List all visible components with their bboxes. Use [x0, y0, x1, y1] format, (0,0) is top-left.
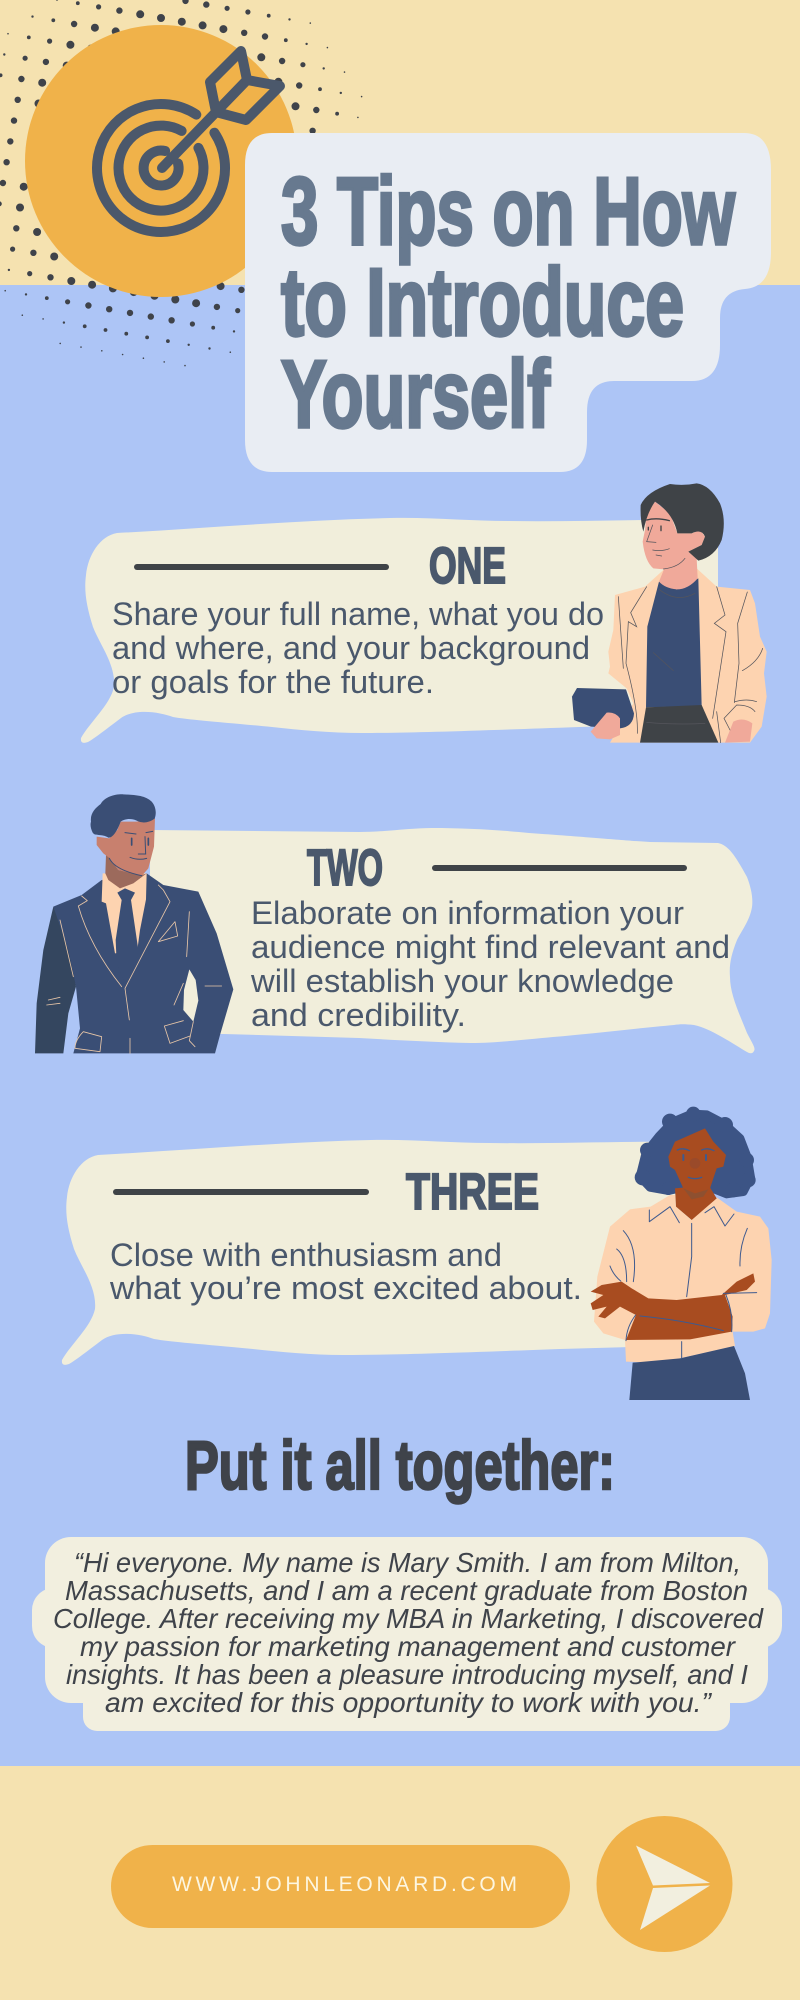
title: [281, 158, 735, 448]
tip two heading: TWO: [307, 839, 383, 896]
panel: tip two speech bubble: [150, 828, 755, 1053]
tip two divider line: [432, 865, 687, 871]
panel: tip three speech bubble: [62, 1140, 699, 1365]
website address: WWW.JOHNLEONARD.COM: [172, 1873, 517, 1896]
illustration: woman with clutch: [572, 483, 767, 743]
tip two text: [250, 895, 730, 1033]
example quote text: Massachusetts, and I am a recent graduate from Boston: [65, 1575, 748, 1606]
illustration: woman with crossed arms: [591, 1107, 772, 1400]
halftone dot pattern: [0, 0, 362, 366]
tip one text: or goals for the future.: [112, 664, 434, 700]
tip three text: Close with enthusiasm and: [110, 1237, 502, 1273]
tip one text: [112, 596, 604, 700]
illustration: man in suit: [35, 794, 233, 1053]
panel: tip one speech bubble: [81, 518, 718, 743]
tip two text: and credibility.: [251, 997, 466, 1033]
background: cream top band: [0, 0, 800, 285]
tip two text: Elaborate on information your: [251, 895, 684, 931]
tip one heading: ONE: [429, 537, 506, 594]
tip three text: [109, 1237, 582, 1306]
icon: paper plane in orange circle: [596, 1816, 732, 1952]
example quote text: my passion for marketing management and customer: [80, 1631, 737, 1662]
example quote text: [53, 1547, 764, 1718]
panel: example quote: [32, 1537, 782, 1731]
tip three text: what you’re most excited about.: [109, 1270, 582, 1306]
tip two text: audience might find relevant and: [251, 929, 730, 965]
tip one text: Share your full name, what you do: [112, 596, 604, 632]
title: Yourself: [281, 341, 551, 448]
background: cream footer band: [0, 1766, 800, 2000]
icon: target with arrow: [97, 51, 280, 232]
orange circle behind target: [25, 25, 297, 297]
example quote text: insights. It has been a pleasure introducing myself, and I: [66, 1659, 748, 1690]
website button: [111, 1845, 570, 1928]
example quote text: “Hi everyone. My name is Mary Smith. I am from Milton,: [74, 1547, 741, 1578]
tip three divider line: [113, 1189, 369, 1195]
tip three heading: THREE: [406, 1163, 539, 1220]
heading: put it all together: Put it all together:: [185, 1427, 615, 1504]
tip one text: and where, and your background: [112, 630, 590, 666]
example quote text: College. After receiving my MBA in Marketing, I discovered: [53, 1603, 764, 1634]
example quote text: am excited for this opportunity to work with you.”: [105, 1687, 713, 1718]
tip two text: will establish your knowledge: [250, 963, 674, 999]
tip one divider line: [134, 564, 389, 570]
title panel: [245, 133, 771, 472]
